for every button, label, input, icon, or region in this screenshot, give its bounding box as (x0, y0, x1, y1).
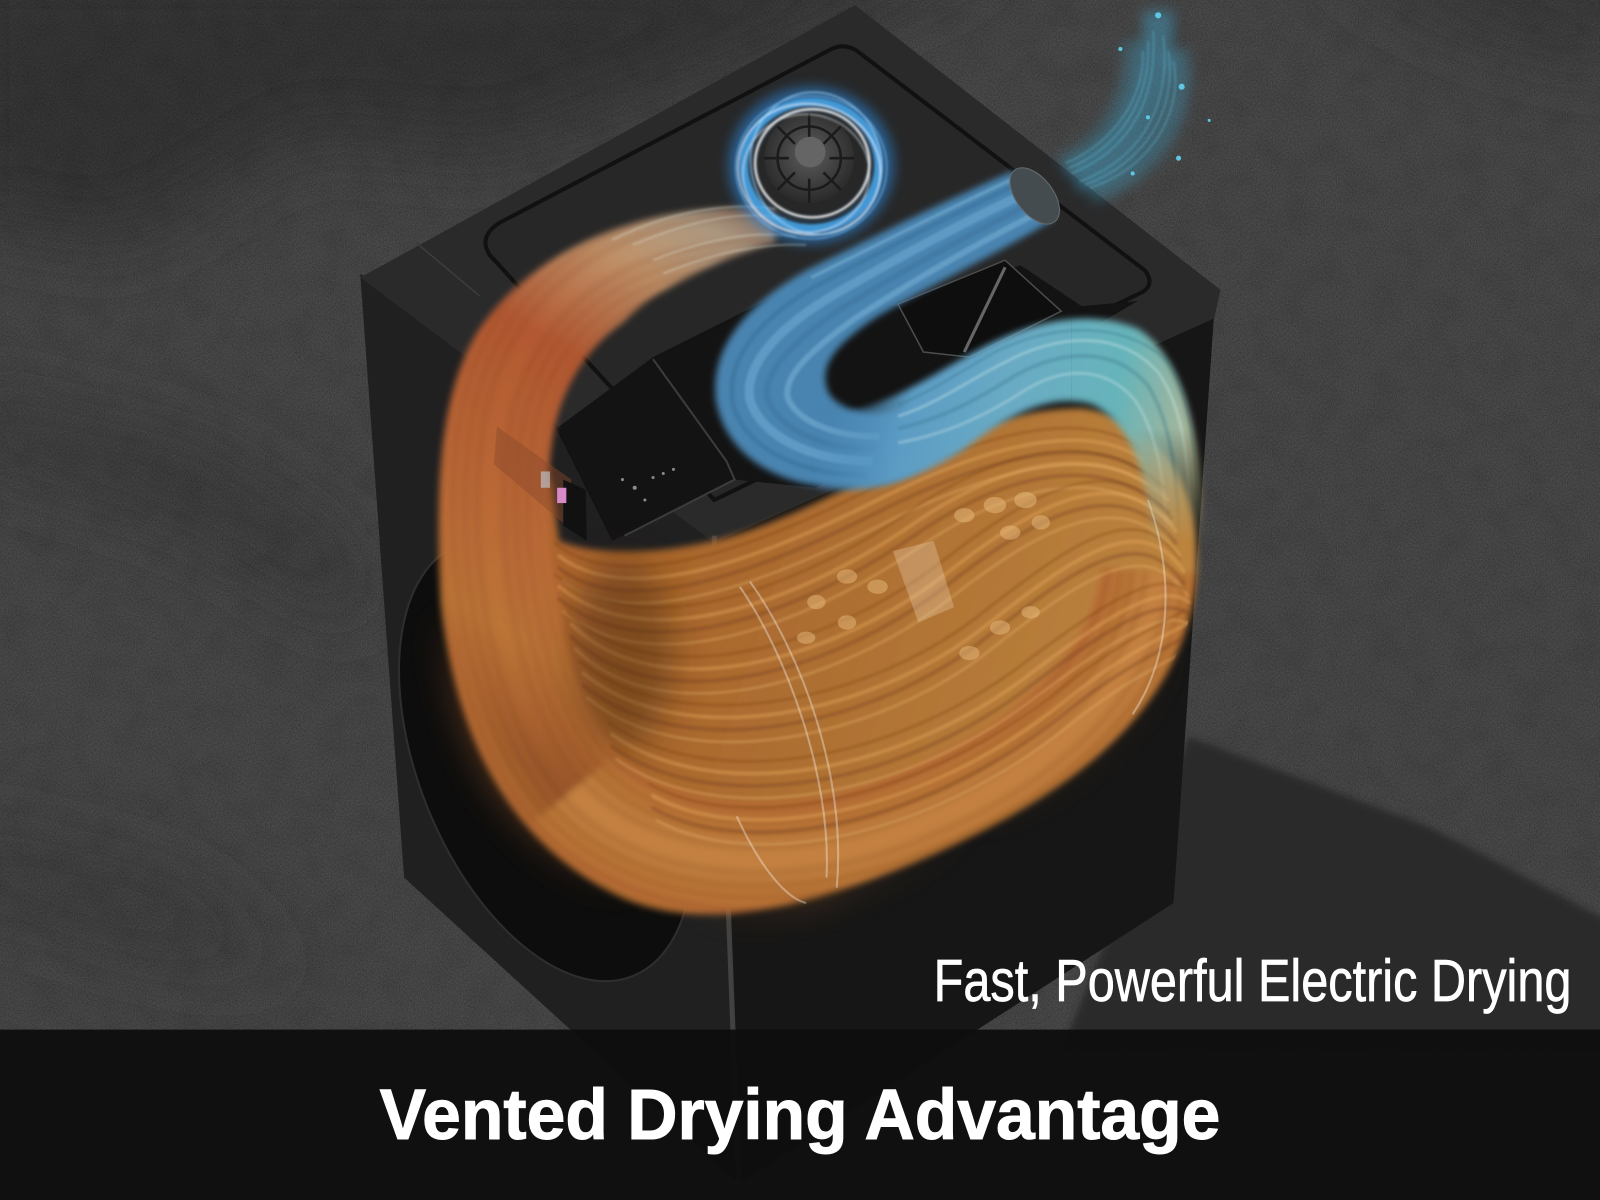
icon: exhaust vent plume (1061, 10, 1211, 192)
corner edge (714, 536, 739, 1184)
drum details (797, 492, 1050, 660)
icon: fan with blue ring (726, 77, 898, 249)
filter box (898, 260, 1061, 357)
right face (716, 311, 1214, 1184)
glow (449, 582, 1189, 907)
second half of S curve (816, 319, 1202, 551)
shaded inner hollow (571, 556, 673, 750)
left face (360, 273, 739, 1184)
outer loop streaks (490, 228, 1158, 860)
blue airflow swirl (715, 159, 1202, 551)
body (441, 228, 1197, 914)
control panel display (494, 427, 587, 541)
duct cap (1000, 159, 1069, 233)
duct and first bend (715, 159, 1069, 488)
floor shadow (1061, 737, 1600, 1051)
top recess outline (485, 46, 1150, 500)
title: Vented Drying Advantage: Vented Drying Advantage (380, 1075, 1220, 1155)
orange airflow swirl (441, 207, 1197, 914)
arch streaks (490, 228, 806, 791)
drum streaks (555, 428, 1193, 844)
top surface (360, 5, 1220, 543)
interior window (556, 265, 1138, 541)
door (341, 497, 751, 1024)
machine cabinet (341, 5, 1220, 1184)
pale wisps to fan (612, 207, 806, 273)
title bar (0, 1030, 1600, 1200)
